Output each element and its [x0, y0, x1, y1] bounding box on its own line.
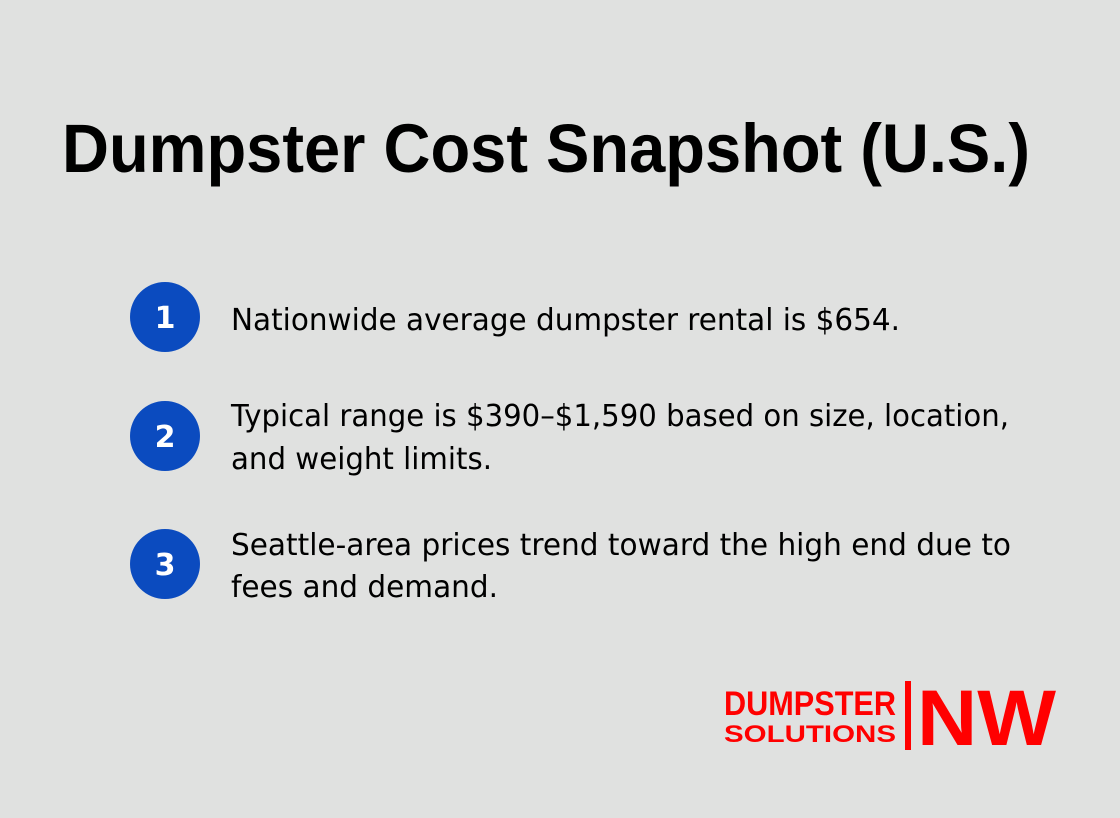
logo: DUMPSTER [724, 685, 896, 723]
text 2: and weight limits. [231, 442, 492, 477]
item 3 [130, 528, 1011, 605]
text 2: Typical range is $390–$1,590 based on size, location, [230, 399, 1009, 434]
logo: NW [917, 673, 1056, 762]
item 1 [130, 282, 900, 352]
icon: number 2: 2 [155, 420, 175, 455]
logo [724, 673, 1056, 762]
text 3: Seattle-area prices trend toward the high end due to [231, 528, 1011, 563]
text 3: fees and demand. [231, 570, 498, 605]
title: Dumpster Cost Snapshot (U.S.) [62, 110, 1030, 187]
logo: SOLUTIONS [724, 721, 896, 748]
item 2 [130, 399, 1009, 477]
text 1: Nationwide average dumpster rental is $654. [231, 303, 900, 338]
icon: number 1: 1 [155, 301, 175, 336]
icon: number 3: 3 [155, 548, 175, 583]
icon: number 3 [130, 529, 200, 599]
icon: number 1 [130, 282, 200, 352]
icon: number 2 [130, 401, 200, 471]
